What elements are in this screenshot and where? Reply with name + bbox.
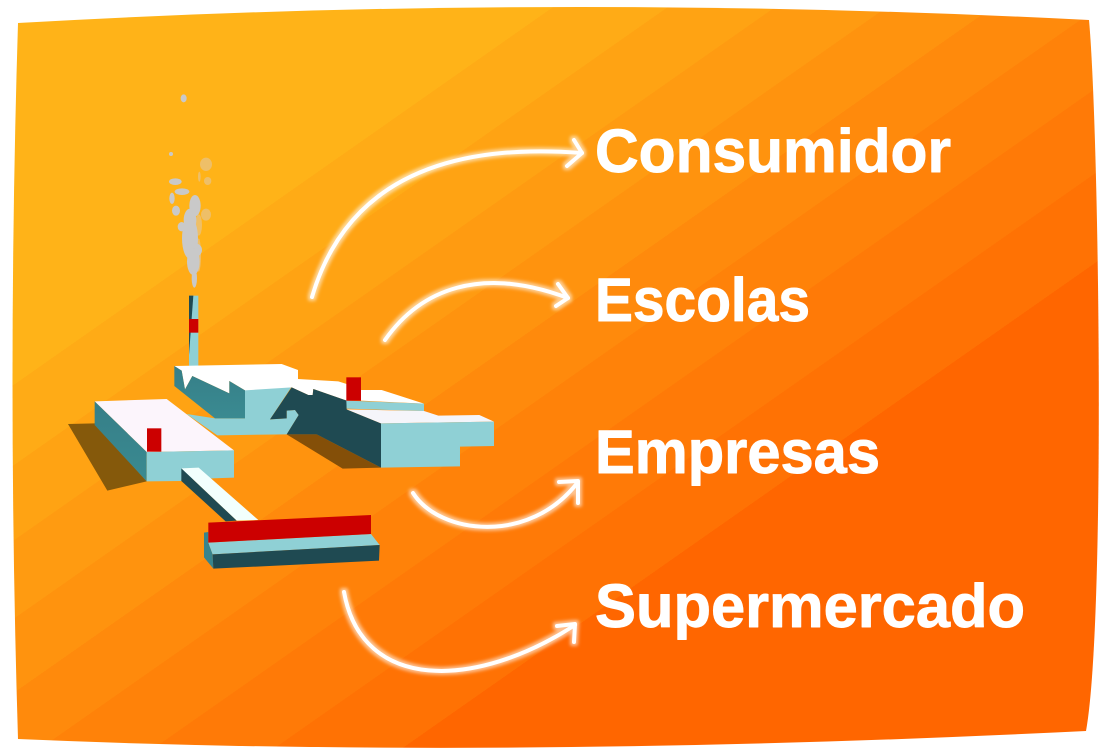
arrow: to Empresas	[413, 481, 578, 527]
arrow: to Consumidor	[312, 140, 582, 297]
right building	[270, 377, 494, 468]
label: Empresas: Empresas	[595, 418, 880, 486]
bottom block	[204, 515, 380, 569]
chimney	[189, 296, 198, 366]
icon: chimney smoke	[169, 94, 212, 288]
right building shadow	[287, 434, 381, 469]
label: Consumidor: Consumidor	[595, 117, 951, 185]
left building shadow	[68, 423, 147, 491]
conveyor	[181, 468, 258, 521]
central building	[174, 364, 347, 435]
left building	[95, 399, 234, 481]
label: Supermercado: Supermercado	[595, 572, 1025, 640]
label: Escolas: Escolas	[595, 266, 810, 334]
icon: factory illustration	[68, 296, 494, 569]
arrow: to Escolas	[385, 283, 568, 340]
arrow: to Supermercado	[344, 592, 575, 671]
